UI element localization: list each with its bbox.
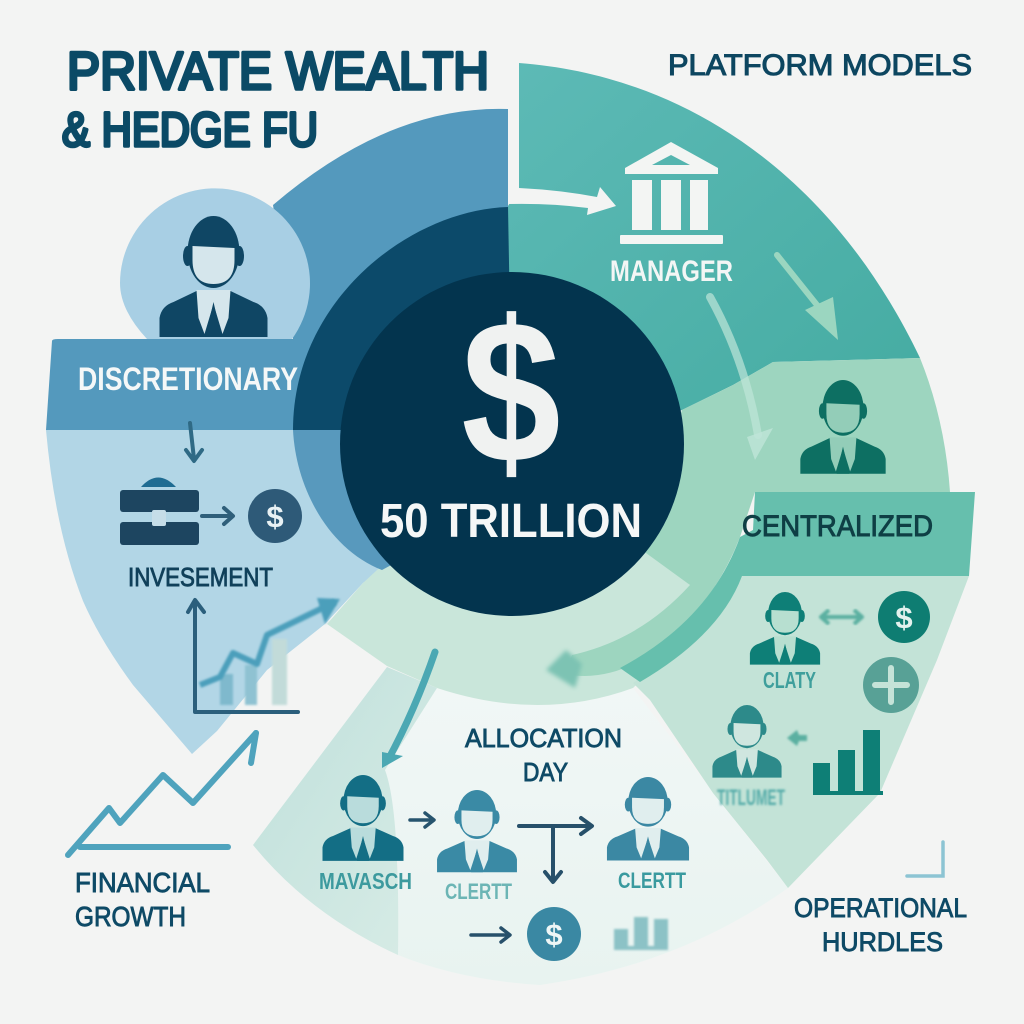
arrow: briefcase to dollar xyxy=(202,508,233,524)
icon: dollar coin: $ xyxy=(266,499,284,534)
label: operational: OPERATIONAL xyxy=(794,893,967,923)
label: financial: FINANCIAL xyxy=(75,867,210,898)
panel: discretionary wedge top xyxy=(273,109,508,430)
title: & HEDGE FU xyxy=(62,104,318,157)
ring: medium lower xyxy=(293,430,512,570)
panel: centralized shield xyxy=(633,576,969,888)
chart: pale bars xyxy=(614,917,668,950)
ring: dark upper xyxy=(293,207,512,430)
banner: discretionary xyxy=(46,339,293,430)
chart: financial growth xyxy=(68,733,256,855)
icon: bank xyxy=(620,142,723,244)
arrow: t junction xyxy=(519,818,592,882)
icon: person mavasch xyxy=(322,775,404,861)
panel: allocation day xyxy=(253,667,788,985)
label: centralized: CENTRALIZED xyxy=(742,510,933,543)
person circle xyxy=(120,188,310,339)
icon: big dollar: $ xyxy=(461,278,561,506)
heading: allocation: ALLOCATION xyxy=(465,723,622,753)
icon: dollar coin xyxy=(248,489,302,543)
arrow: small left xyxy=(787,730,807,746)
title xyxy=(62,42,489,157)
panel: allocation left sliver xyxy=(253,667,437,955)
icon: dollar circle green: $ xyxy=(895,600,913,635)
arrow: down to briefcase xyxy=(186,423,202,461)
arrow: teal down-left xyxy=(382,652,435,768)
panel: platform wedge xyxy=(508,63,920,440)
panel: centralized upper green xyxy=(565,358,950,676)
chart: discretionary growth xyxy=(188,598,340,712)
arrow: double xyxy=(821,610,862,624)
label: client two: CLERTT xyxy=(618,868,686,893)
arrow: curved band head xyxy=(546,650,582,688)
icon: person claty xyxy=(750,592,820,665)
chart: green bars xyxy=(813,730,883,795)
label: claty: CLATY xyxy=(763,667,816,693)
panel: discretionary shield xyxy=(46,430,380,754)
label: client one: CLERTT xyxy=(445,879,512,904)
icon: person client two xyxy=(607,777,689,860)
icon: centralized person xyxy=(800,380,886,474)
heading: platform models: PLATFORM MODELS xyxy=(668,49,972,82)
label: manager: MANAGER xyxy=(610,255,733,288)
central circle xyxy=(340,272,684,616)
icon: dollar circle green xyxy=(878,591,930,643)
label: hurdles: HURDLES xyxy=(822,927,943,957)
icon: corner mark xyxy=(907,842,943,876)
icon: briefcase xyxy=(120,478,199,545)
heading: day: DAY xyxy=(523,757,568,787)
label: 50 trillion: 50 TRILLION xyxy=(380,495,642,548)
icon: plus circle xyxy=(863,657,919,713)
label: mavasch: MAVASCH xyxy=(319,868,412,894)
label: titlumet: TITLUMET xyxy=(717,785,785,810)
icon: dollar circle blue: $ xyxy=(545,917,563,952)
icon: person titlumet xyxy=(712,705,782,778)
banner: centralized xyxy=(620,492,975,682)
panel: lower pale ring xyxy=(327,530,705,705)
arrow: manager down curved xyxy=(710,297,773,460)
arrow: to bottom dollar xyxy=(471,928,510,942)
label: investment: INVESEMENT xyxy=(128,562,273,592)
icon: dollar circle blue xyxy=(527,907,581,961)
label: growth: GROWTH xyxy=(75,901,186,932)
label: discretionary: DISCRETIONARY xyxy=(78,361,298,397)
arrow: mavasch to client xyxy=(410,813,434,827)
arrow: manager to centralized person xyxy=(777,255,838,340)
title: PRIVATE WEALTH xyxy=(67,42,489,101)
icon: discretionary person xyxy=(160,216,268,337)
arrow: white to bank xyxy=(508,150,616,215)
icon: person client one xyxy=(437,790,517,872)
